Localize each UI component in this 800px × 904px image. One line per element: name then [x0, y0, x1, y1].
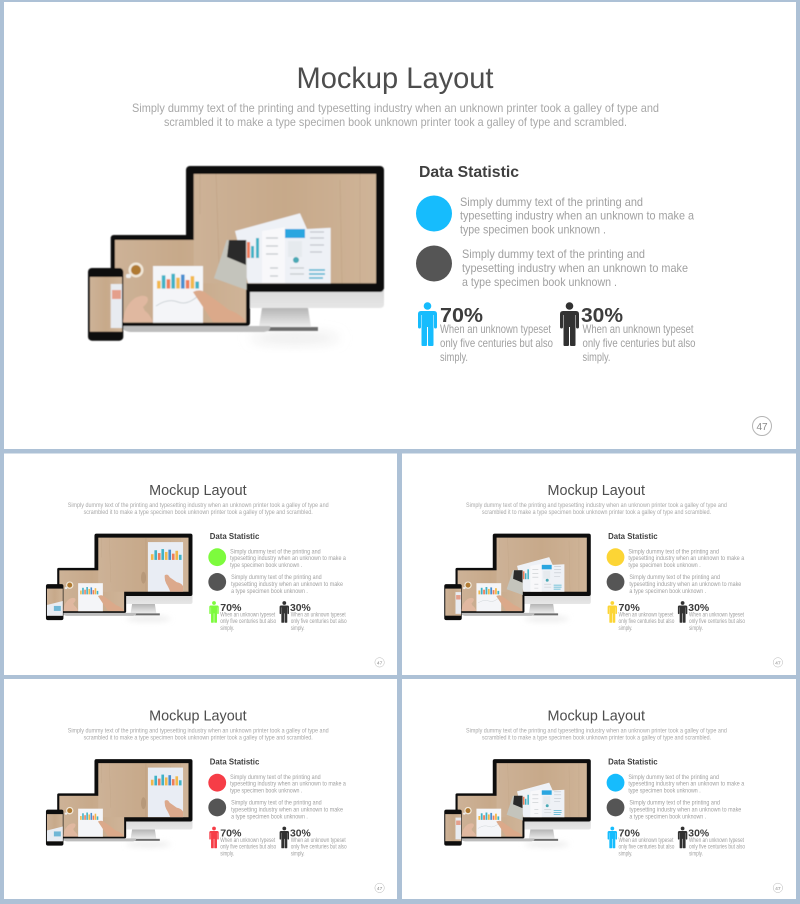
legend text 2: typesetting industry when an unknown to make — [231, 808, 344, 814]
stat text 70%: simply. — [440, 350, 468, 364]
stat text 70%: simply. — [618, 852, 633, 858]
legend text 1: typesetting industry when an unknown to make a — [230, 556, 347, 562]
legend text 2: typesetting industry when an unknown to make — [629, 808, 742, 814]
subtitle — [466, 728, 727, 741]
slide content — [46, 483, 384, 667]
stat 30%: 30% — [290, 828, 311, 839]
stat 70%: 70% — [618, 828, 640, 839]
stat text 70%: When an unknown typeset — [618, 838, 674, 844]
subtitle: scrambled it to make a type specimen book unknown printer took a galley of type and scrambled. — [84, 510, 313, 516]
legend text 2: Simply dummy text of the printing and — [231, 801, 322, 807]
subtitle: Simply dummy text of the printing and typesetting industry when an unknown printer took a galley of type and — [466, 503, 727, 509]
stat text 70%: When an unknown typeset — [440, 322, 552, 336]
legend dot: dark — [208, 799, 226, 816]
legend text 2: typesetting industry when an unknown to make — [629, 582, 742, 588]
legend dot: yellow — [607, 548, 624, 566]
heading: Data Statistic — [210, 532, 260, 541]
stat text 70%: only five centuries but also — [220, 619, 277, 625]
subtitle: scrambled it to make a type specimen book unknown printer took a galley of type and scrambled. — [482, 510, 711, 516]
stat text 30%: only five centuries but also — [291, 845, 347, 851]
stat text 30% — [582, 322, 696, 364]
page number: 47 — [775, 886, 781, 892]
legend text 1: type specimen book unknown . — [628, 789, 701, 795]
legend text 2 — [231, 575, 344, 595]
page number — [375, 883, 384, 893]
legend text 1: type specimen book unknown . — [230, 789, 303, 795]
stat text 30%: simply. — [291, 852, 305, 858]
page number — [375, 658, 384, 667]
legend dot: dark — [607, 799, 624, 816]
stat 30%: 30% — [688, 828, 709, 839]
legend text 1: Simply dummy text of the printing and — [460, 195, 643, 209]
legend text 1: type specimen book unknown . — [628, 563, 701, 569]
legend text 2: a type specimen book unknown . — [231, 815, 308, 821]
heading: data statistic: Data Statistic — [419, 164, 519, 181]
legend text 2: Simply dummy text of the printing and — [629, 801, 720, 807]
subtitle — [68, 728, 329, 741]
subtitle: Simply dummy text of the printing and typesetting industry when an unknown printer took a galley of type and — [68, 503, 329, 509]
slide background — [4, 2, 796, 449]
legend text 1 — [460, 195, 694, 236]
page number: 47 — [775, 660, 781, 666]
legend text 1: typesetting industry when an unknown to make a — [460, 208, 694, 222]
legend text 2: a type specimen book unknown . — [231, 589, 308, 595]
legend text 1: Simply dummy text of the printing and — [230, 775, 321, 781]
legend text 1: typesetting industry when an unknown to make a — [628, 556, 745, 562]
legend dot: green — [208, 548, 226, 566]
stat text 30%: When an unknown typeset — [582, 322, 694, 336]
slide content — [46, 709, 384, 893]
stat text 30%: simply. — [689, 852, 703, 858]
page number — [752, 416, 772, 436]
legend text 1: typesetting industry when an unknown to make a — [628, 782, 745, 788]
page number — [773, 883, 783, 893]
stat 70%: 70% — [220, 603, 241, 614]
stat text 30%: only five centuries but also — [689, 845, 746, 851]
stat 70%: 70% — [618, 603, 640, 614]
icon: person green — [209, 601, 219, 623]
legend dot: dark — [208, 573, 226, 591]
legend text 2 — [462, 247, 688, 289]
device mockup — [46, 759, 192, 847]
legend text 2: a type specimen book unknown . — [629, 589, 706, 595]
icon: person accent — [418, 302, 437, 346]
legend text 2: a type specimen book unknown . — [462, 275, 617, 289]
stat text 30%: simply. — [582, 350, 610, 364]
stat 70%: 70% — [440, 304, 483, 327]
page number: 47 — [756, 422, 768, 433]
stat text 30% — [689, 612, 746, 632]
stat text 30%: simply. — [689, 626, 703, 632]
stat text 30% — [291, 838, 347, 858]
slide background — [402, 454, 796, 675]
subtitle: scrambled it to make a type specimen book unknown printer took a galley of type and scrambled. — [164, 115, 627, 129]
subtitle: Simply dummy text of the printing and typesetting industry when an unknown printer took a galley of type and — [466, 728, 727, 734]
title: Mockup Layout — [149, 483, 248, 499]
title: Mockup Layout — [149, 709, 248, 725]
legend text 2 — [629, 801, 742, 821]
slide background — [402, 679, 796, 899]
stat text 30%: When an unknown typeset — [291, 838, 346, 844]
slide background — [4, 454, 397, 675]
legend text 1: type specimen book unknown . — [460, 222, 606, 236]
legend dot: accent — [416, 196, 452, 232]
device mockup — [46, 534, 192, 622]
slide content — [444, 483, 783, 667]
stat text 70%: When an unknown typeset — [220, 838, 275, 844]
stat text 70%: simply. — [220, 626, 234, 632]
device mockup — [88, 166, 384, 344]
stat text 30%: only five centuries but also — [689, 619, 746, 625]
panel: green slide — [4, 454, 397, 675]
stat text 30%: When an unknown typeset — [291, 612, 346, 618]
legend text 1: typesetting industry when an unknown to make a — [230, 782, 347, 788]
icon: person yellow — [608, 601, 617, 623]
icon: person red — [209, 827, 219, 848]
legend text 2 — [231, 801, 344, 821]
subtitle — [68, 503, 329, 516]
icon: person dark — [678, 601, 687, 623]
heading: Data Statistic — [210, 758, 260, 767]
legend text 2 — [629, 575, 742, 595]
legend text 1 — [230, 775, 347, 795]
legend text 1: Simply dummy text of the printing and — [628, 775, 719, 781]
stat text 70% — [440, 322, 553, 364]
legend text 2: typesetting industry when an unknown to make — [231, 582, 344, 588]
legend text 1 — [230, 549, 347, 569]
subtitle: scrambled it to make a type specimen book unknown printer took a galley of type and scrambled. — [482, 735, 711, 741]
title: Mockup Layout — [547, 709, 646, 725]
stat text 70%: simply. — [618, 626, 633, 632]
stat text 70% — [618, 838, 675, 858]
legend text 2: Simply dummy text of the printing and — [231, 575, 322, 581]
legend text 1 — [628, 775, 745, 795]
legend text 2: typesetting industry when an unknown to make — [462, 261, 688, 275]
legend text 1: type specimen book unknown . — [230, 563, 303, 569]
stat 30%: 30% — [688, 603, 709, 614]
stat text 70%: only five centuries but also — [220, 845, 277, 851]
stat text 70%: simply. — [220, 852, 234, 858]
subtitle — [466, 503, 727, 516]
title: Mockup Layout — [296, 62, 494, 95]
legend dot: blue — [607, 774, 624, 792]
heading: Data Statistic — [608, 532, 658, 541]
panel: yellow slide — [402, 454, 796, 675]
slide content — [444, 709, 783, 893]
stat text 30%: only five centuries but also — [291, 619, 347, 625]
device mockup — [444, 759, 591, 847]
icon: person dark — [280, 601, 289, 623]
legend dot: red — [208, 774, 226, 792]
stat text 70%: only five centuries but also — [440, 336, 553, 350]
legend dot: dark — [607, 573, 624, 591]
page number: 47 — [377, 660, 383, 666]
legend text 2: Simply dummy text of the printing and — [629, 575, 720, 581]
icon: person dark — [678, 827, 687, 848]
stat text 30%: simply. — [291, 626, 305, 632]
slide background — [4, 679, 397, 899]
stat text 70% — [618, 612, 675, 632]
icon: person dark — [280, 827, 289, 848]
stat text 70% — [220, 838, 277, 858]
page number: 47 — [377, 886, 383, 892]
legend text 1 — [628, 549, 745, 569]
stat text 70% — [220, 612, 277, 632]
legend text 1: Simply dummy text of the printing and — [230, 549, 321, 555]
stat 30%: 30% — [290, 603, 311, 614]
subtitle: Simply dummy text of the printing and typesetting industry when an unknown printer took a galley of type and — [132, 101, 659, 115]
subtitle — [132, 101, 659, 129]
heading: Data Statistic — [608, 758, 658, 767]
title: Mockup Layout — [547, 483, 646, 499]
subtitle: Simply dummy text of the printing and typesetting industry when an unknown printer took a galley of type and — [68, 728, 329, 734]
legend dot: dark — [416, 246, 452, 282]
panel: red slide — [4, 679, 397, 899]
subtitle: scrambled it to make a type specimen book unknown printer took a galley of type and scrambled. — [84, 735, 313, 741]
stat text 30%: When an unknown typeset — [689, 612, 744, 618]
stat text 30%: only five centuries but also — [582, 336, 696, 350]
panel: main slide — [4, 2, 796, 449]
stat text 70%: When an unknown typeset — [220, 612, 275, 618]
stat text 70%: When an unknown typeset — [618, 612, 674, 618]
device mockup — [444, 534, 591, 622]
legend text 2: a type specimen book unknown . — [629, 815, 706, 821]
legend text 2: Simply dummy text of the printing and — [462, 247, 645, 261]
page number — [773, 658, 783, 667]
stat text 70%: only five centuries but also — [618, 619, 675, 625]
panel: blue slide — [402, 679, 796, 899]
stat text 30% — [689, 838, 746, 858]
legend text 1: Simply dummy text of the printing and — [628, 549, 719, 555]
icon: person blue — [608, 827, 617, 848]
stat 70%: 70% — [220, 828, 241, 839]
stat 30%: 30% — [581, 304, 623, 327]
stat text 30%: When an unknown typeset — [689, 838, 744, 844]
stat text 70%: only five centuries but also — [618, 845, 675, 851]
slide content — [88, 62, 772, 436]
icon: person dark — [560, 302, 579, 346]
stat text 30% — [291, 612, 347, 632]
